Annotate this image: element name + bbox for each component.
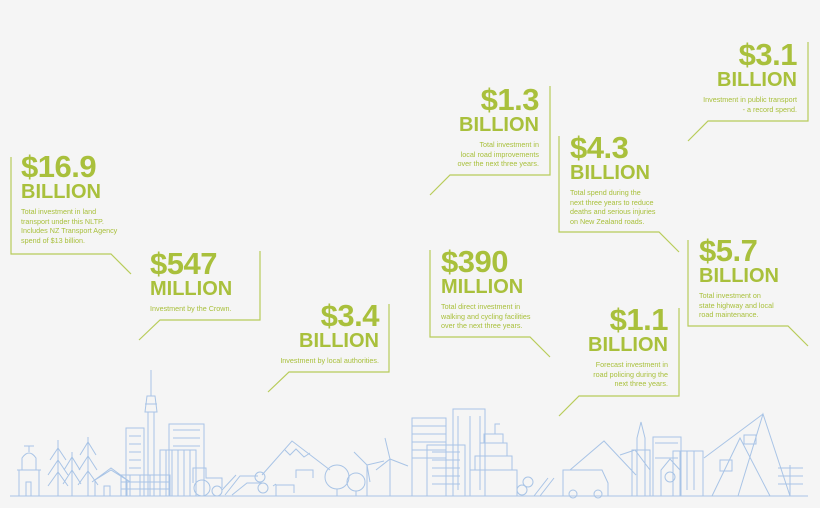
callout: 390 million: MILLION [441,276,523,298]
gondola mountains [704,414,803,496]
callout: 16.9 billion: transport under this NLTP. [21,217,104,226]
callout: 390 million: walking and cycling facilities [441,312,530,321]
camper [517,441,650,498]
house [92,468,130,496]
callout: 1.1 billion: next three years. [614,379,668,388]
callout: 3.1 billion: $3.1 [739,37,797,72]
callout: 5.7 billion [699,233,779,319]
callout: 4.3 billion [570,130,656,226]
callout: 547 million: Investment by the Crown. [150,304,232,313]
cows [273,470,313,496]
callout: 4.3 billion: $4.3 [570,130,628,165]
sky tower [145,370,157,496]
city right [412,409,517,496]
callout: 3.1 billion: Investment in public transport [703,95,797,104]
callout: 3.4 billion: $3.4 [321,298,379,333]
callout: 4.3 billion: BILLION [570,162,650,184]
callout: 1.3 billion: over the next three years. [457,159,539,168]
callout: 3.4 billion: BILLION [299,330,379,352]
callout: 3.4 billion: Investment by local authorities. [280,356,379,365]
callout: 1.3 billion: local road improvements [461,150,539,159]
callout: 5.7 billion: $5.7 [699,233,757,268]
callout: 547 million: $547 [150,246,217,281]
windmills [354,438,408,496]
callout: 390 million: $390 [441,244,508,279]
callout: 5.7 billion: state highway and local [699,301,774,310]
callout: 3.1 billion: - a record spend. [743,105,797,114]
logs [222,472,268,496]
buildings [121,424,204,496]
callout: 3.1 billion [703,37,797,114]
mountain [262,441,330,475]
callout: 390 million [441,244,530,330]
lighthouse [17,446,41,496]
callout: 16.9 billion: BILLION [21,181,101,203]
callout: 1.1 billion: road policing during the [593,370,668,379]
tractor [193,468,222,496]
callout: 390 million: Total direct investment in [441,302,520,311]
callout: 1.1 billion: Forecast investment in [596,360,668,369]
callout: 3.1 billion: BILLION [717,69,797,91]
callout: 5.7 billion: Total investment on [699,291,761,300]
callout: 16.9 billion: Includes NZ Transport Agency [21,226,117,235]
callout: 1.3 billion: BILLION [459,114,539,136]
cathedral [632,422,703,496]
callout: 547 million [150,246,232,313]
callout: 1.3 billion: $1.3 [481,82,539,117]
callout: 547 million: MILLION [150,278,232,300]
callout: 1.1 billion: BILLION [588,334,668,356]
callout: 16.9 billion: $16.9 [21,149,96,184]
callout: 1.1 billion [588,302,668,388]
callout: 1.1 billion: $1.1 [610,302,668,337]
callout: 4.3 billion: next three years to reduce [570,198,654,207]
callout: 4.3 billion: on New Zealand roads. [570,217,644,226]
callout: 3.4 billion [280,298,380,365]
callout: 4.3 billion: Total spend during the [570,188,641,197]
callout: 1.3 billion: Total investment in [479,140,539,149]
fruit trees [325,465,365,496]
callout: 16.9 billion: spend of $13 billion. [21,236,85,245]
trees [48,437,98,496]
callout: 5.7 billion: BILLION [699,265,779,287]
callout: 4.3 billion: deaths and serious injuries [570,207,656,216]
callout: 5.7 billion: road maintenance. [699,310,759,319]
callout: 390 million: over the next three years. [441,321,523,330]
callout: 16.9 billion: Total investment in land [21,207,96,216]
callout: 1.3 billion [457,82,539,168]
callout: 16.9 billion [21,149,118,245]
